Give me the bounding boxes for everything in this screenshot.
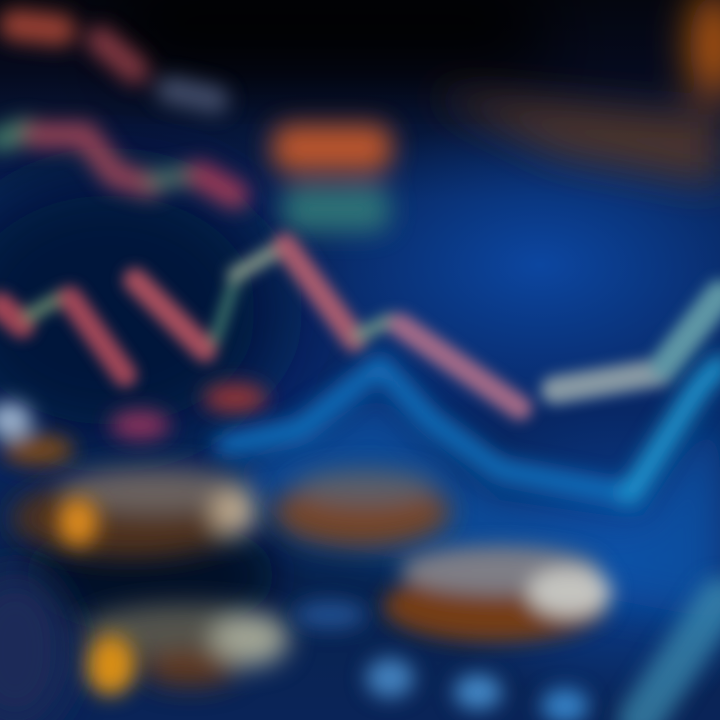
- coin: center: [274, 470, 450, 546]
- orange and green bars: [272, 124, 392, 232]
- coins: [12, 468, 612, 695]
- blue haze around trend: [225, 395, 720, 620]
- coin glint: upper left: [58, 498, 98, 546]
- orange glow top right: [430, 0, 720, 185]
- bottom glowing dots: [294, 601, 589, 720]
- bottom left dark shape: [0, 570, 70, 720]
- coin: upper left: [12, 468, 257, 558]
- middle trend line: [0, 245, 720, 408]
- coin: right: [383, 546, 612, 642]
- coin shadow: left stack: [25, 515, 275, 635]
- top left candlestick trend lines: [0, 25, 235, 195]
- coin glint: lower left: [84, 635, 136, 695]
- blue trend line: [225, 365, 720, 720]
- small left marks: [0, 383, 267, 466]
- coin: lower left: [80, 604, 290, 686]
